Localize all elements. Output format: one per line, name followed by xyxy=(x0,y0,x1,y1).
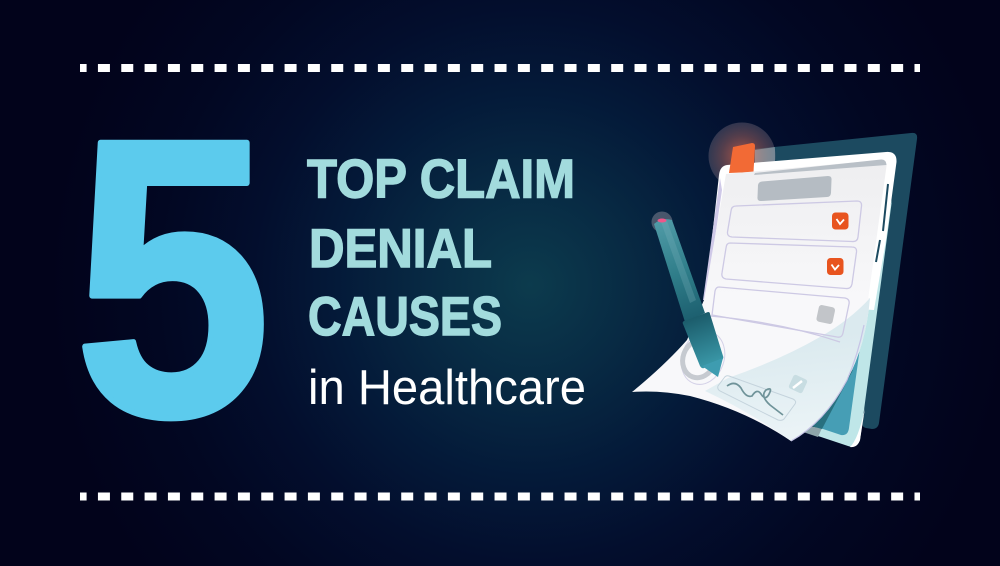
side slots xyxy=(876,184,888,262)
stamp circle xyxy=(674,325,732,391)
orange button 1 xyxy=(832,212,848,230)
pen xyxy=(652,212,723,377)
page xyxy=(704,160,887,300)
back panel xyxy=(745,133,917,429)
signature box xyxy=(718,376,796,420)
translucent panel highlight xyxy=(755,147,775,170)
form row 2 xyxy=(722,243,857,289)
teal blue layer xyxy=(820,340,861,435)
pen tip light xyxy=(658,218,666,222)
sheet edge xyxy=(791,325,864,441)
title line: denial: DENIAL xyxy=(309,217,492,279)
form row 3 xyxy=(712,287,849,337)
subtitle: in healthcare: in Healthcare xyxy=(308,361,586,415)
form row 1 xyxy=(727,201,862,242)
form row 4 line xyxy=(710,316,840,342)
illustration: clipboard and pen xyxy=(632,122,917,447)
title line: top claim: TOP CLAIM xyxy=(307,148,575,210)
orange button 2 xyxy=(827,258,844,275)
pencil badge xyxy=(788,374,808,394)
teal dark layer xyxy=(800,370,853,429)
pen body highlight xyxy=(661,221,696,303)
board side white rim xyxy=(850,408,865,447)
board front xyxy=(705,152,897,310)
grey fold xyxy=(800,425,822,437)
tab glow xyxy=(708,122,776,190)
pen nib xyxy=(702,358,723,377)
bottom dashed border xyxy=(80,492,920,500)
pen cap glow xyxy=(652,212,672,232)
orange tab xyxy=(729,143,755,173)
header bar xyxy=(757,176,832,201)
title line: causes: CAUSES xyxy=(308,285,502,347)
board left lilac edge xyxy=(703,178,722,300)
page top strip xyxy=(754,159,886,175)
pen body xyxy=(654,219,705,322)
curled sheet xyxy=(632,298,870,441)
pen grip xyxy=(683,312,723,368)
big number 5: 5 xyxy=(74,57,271,499)
signature squiggle xyxy=(727,383,783,415)
grey button xyxy=(816,304,836,325)
board side edge xyxy=(800,200,892,447)
title xyxy=(307,148,586,415)
top dashed border xyxy=(80,64,920,72)
sheet shaded corner xyxy=(705,298,870,441)
